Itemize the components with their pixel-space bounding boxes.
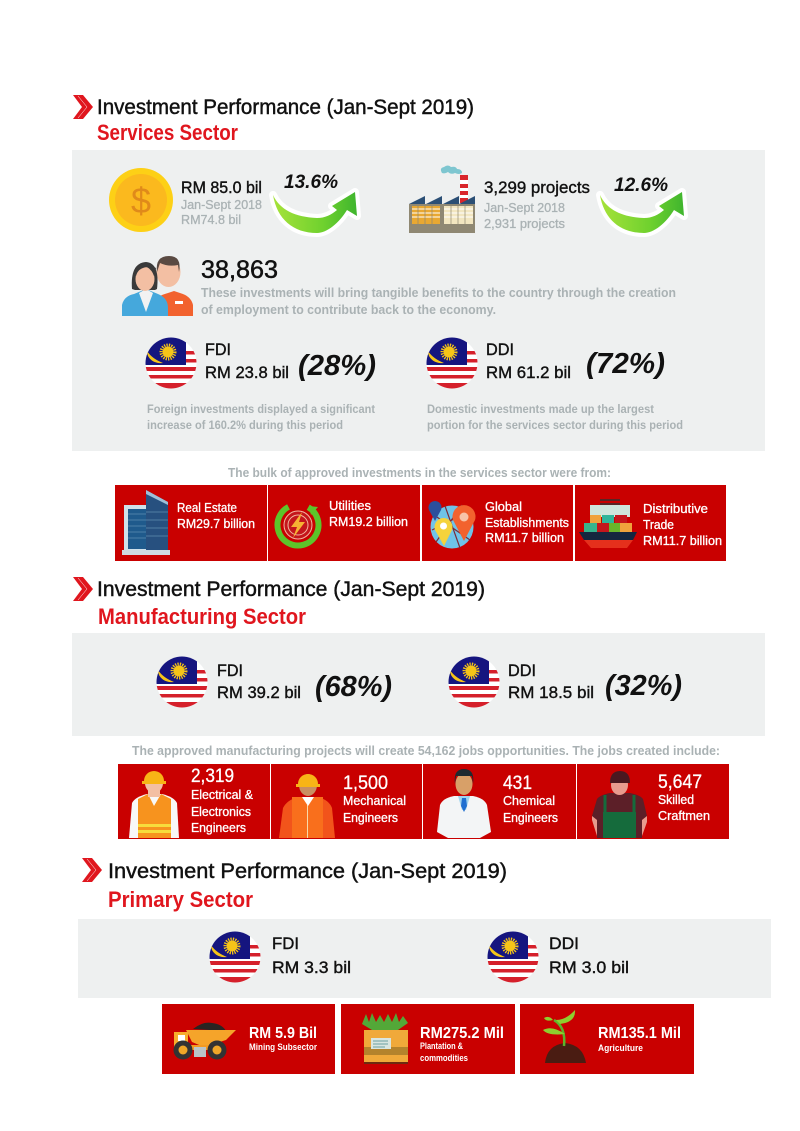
ddi block: portion for the services sector during this period (427, 418, 683, 432)
card: mechanical engineers: Mechanical (343, 794, 406, 808)
icon: malaysian flag (426, 337, 478, 389)
percentage: 12.6%: 12.6% (614, 175, 668, 196)
section: services sector (72, 95, 765, 561)
card: global establishments: Establishments (485, 516, 569, 530)
card: global establishments: Global (485, 500, 522, 514)
subheading: services sector: Services Sector (97, 120, 238, 145)
card: distributive trade: Trade (643, 518, 674, 532)
icon: malaysian flag (156, 656, 208, 708)
fdi block: (28%) (298, 350, 376, 382)
card: utilities (268, 485, 420, 561)
card: distributive trade (575, 485, 726, 561)
card: utilities: Utilities (329, 499, 371, 513)
card: chemical engineers (423, 764, 576, 839)
icon: red chevrons (73, 577, 93, 601)
card: real estate: Real Estate (177, 501, 237, 515)
panel: primary fdi and ddi: DDI (549, 934, 579, 953)
fdi block: Foreign investments displayed a significant (147, 402, 375, 416)
metric: investment value: RM74.8 bil (181, 212, 241, 227)
metric: projects: Jan-Sept 2018 (484, 200, 565, 215)
panel: primary fdi and ddi (78, 919, 771, 998)
ddi block: (72%) (586, 348, 665, 380)
percentage: 13.6%: 13.6% (284, 172, 338, 193)
card: plantation and commodities: RM275.2 Mil (420, 1025, 504, 1042)
fdi block: FDI (205, 340, 231, 359)
card: chemical engineers: Engineers (503, 811, 558, 825)
caption: bulk of investments: The bulk of approved investments in the services sector were from: (228, 466, 611, 480)
card: electrical engineers: Electronics (191, 805, 251, 819)
section: primary sector (78, 858, 771, 1074)
panel: manufacturing fdi and ddi: (68%) (315, 671, 392, 703)
icon: malaysian flag (145, 337, 197, 389)
metric: investment value (181, 178, 262, 227)
card: electrical engineers: Engineers (191, 821, 246, 835)
panel: primary fdi and ddi: RM 3.3 bil (272, 958, 351, 977)
section: manufacturing sector (72, 577, 765, 839)
metric: jobs created: These investments will bring tangible benefits to the country through the creation (201, 286, 676, 300)
card: plantation and commodities: Plantation & (420, 1041, 463, 1051)
metric: projects: 2,931 projects (484, 216, 565, 231)
card: global establishments: RM11.7 billion (485, 531, 564, 545)
arrow: projects growth (600, 192, 684, 233)
card: plantation and commodities (341, 1004, 515, 1074)
panel: primary fdi and ddi: RM 3.0 bil (549, 958, 629, 977)
card: mechanical engineers: Engineers (343, 811, 398, 825)
fdi block: RM 23.8 bil (205, 363, 289, 382)
subheading: primary sector: Primary Sector (108, 887, 253, 912)
card: agriculture (520, 1004, 694, 1074)
card: distributive trade: RM11.7 billion (643, 534, 722, 548)
ddi block: DDI (486, 340, 514, 359)
card: distributive trade: Distributive (643, 502, 708, 516)
metric: projects: 3,299 projects (484, 178, 590, 197)
card: real estate (115, 485, 267, 561)
card: plantation and commodities: commodities (420, 1053, 468, 1063)
subheading: manufacturing sector: Manufacturing Sector (98, 604, 306, 629)
panel: manufacturing fdi and ddi: RM 18.5 bil (508, 683, 594, 702)
card: agriculture: RM135.1 Mil (598, 1025, 681, 1042)
icon: two employees (122, 256, 193, 316)
card: chemical engineers: 431 (503, 773, 532, 794)
heading: investment performance: Investment Performance (Jan-Sept 2019) (97, 578, 485, 601)
fdi block (145, 337, 376, 432)
icon: malaysian flag (209, 931, 261, 983)
metric: projects (484, 178, 590, 231)
ddi block (426, 337, 683, 432)
card: real estate: RM29.7 billion (177, 517, 255, 531)
panel: manufacturing fdi and ddi: RM 39.2 bil (217, 683, 301, 702)
card: skilled craftmen: 5,647 (658, 772, 702, 793)
card: mechanical engineers (271, 764, 422, 839)
icon: malaysian flag (487, 931, 539, 983)
panel: primary fdi and ddi: FDI (272, 934, 299, 953)
ddi block: RM 61.2 bil (486, 363, 571, 382)
panel: manufacturing fdi and ddi: FDI (217, 661, 243, 680)
card: agriculture: Agriculture (598, 1043, 643, 1053)
card: skilled craftmen (577, 764, 729, 839)
heading: investment performance: Investment Performance (Jan-Sept 2019) (108, 860, 507, 883)
card: chemical engineers: Chemical (503, 794, 555, 808)
panel: manufacturing fdi and ddi: (32%) (605, 670, 682, 702)
panel: manufacturing fdi and ddi (72, 633, 765, 736)
icon: gold coin: $ (131, 180, 151, 221)
metric: investment value: RM 85.0 bil (181, 178, 262, 197)
card: skilled craftmen: Skilled (658, 793, 694, 807)
ddi block: Domestic investments made up the largest (427, 402, 654, 416)
heading: investment performance: Investment Performance (Jan-Sept 2019) (97, 96, 474, 119)
metric: jobs created: of employment to contribute back to the economy. (201, 303, 496, 317)
panel: services summary (72, 150, 765, 451)
caption: jobs created: The approved manufacturing projects will create 54,162 jobs opportunities. The jobs created include: (132, 744, 720, 758)
card: electrical engineers (118, 764, 270, 839)
panel: manufacturing fdi and ddi: DDI (508, 661, 536, 680)
fdi block: increase of 160.2% during this period (147, 418, 343, 432)
card: skilled craftmen: Craftmen (658, 809, 710, 823)
card: mining subsector: Mining Subsector (249, 1042, 317, 1052)
icon: factory (409, 166, 475, 233)
icon: gold coin (109, 168, 173, 232)
card: electrical engineers: 2,319 (191, 766, 234, 787)
metric: investment value: Jan-Sept 2018 (181, 197, 262, 212)
card: global establishments (422, 485, 573, 561)
card: utilities: RM19.2 billion (329, 515, 408, 529)
icon: red chevrons (82, 858, 102, 882)
icon: red chevrons (73, 95, 93, 119)
card: mining subsector: RM 5.9 Bil (249, 1025, 317, 1042)
metric: jobs created: 38,863 (201, 256, 278, 284)
arrow: investment growth (273, 192, 357, 233)
icon: malaysian flag (448, 656, 500, 708)
card: mining subsector (162, 1004, 335, 1074)
card: electrical engineers: Electrical & (191, 788, 254, 802)
card: mechanical engineers: 1,500 (343, 773, 388, 794)
metric: jobs created (201, 256, 676, 317)
